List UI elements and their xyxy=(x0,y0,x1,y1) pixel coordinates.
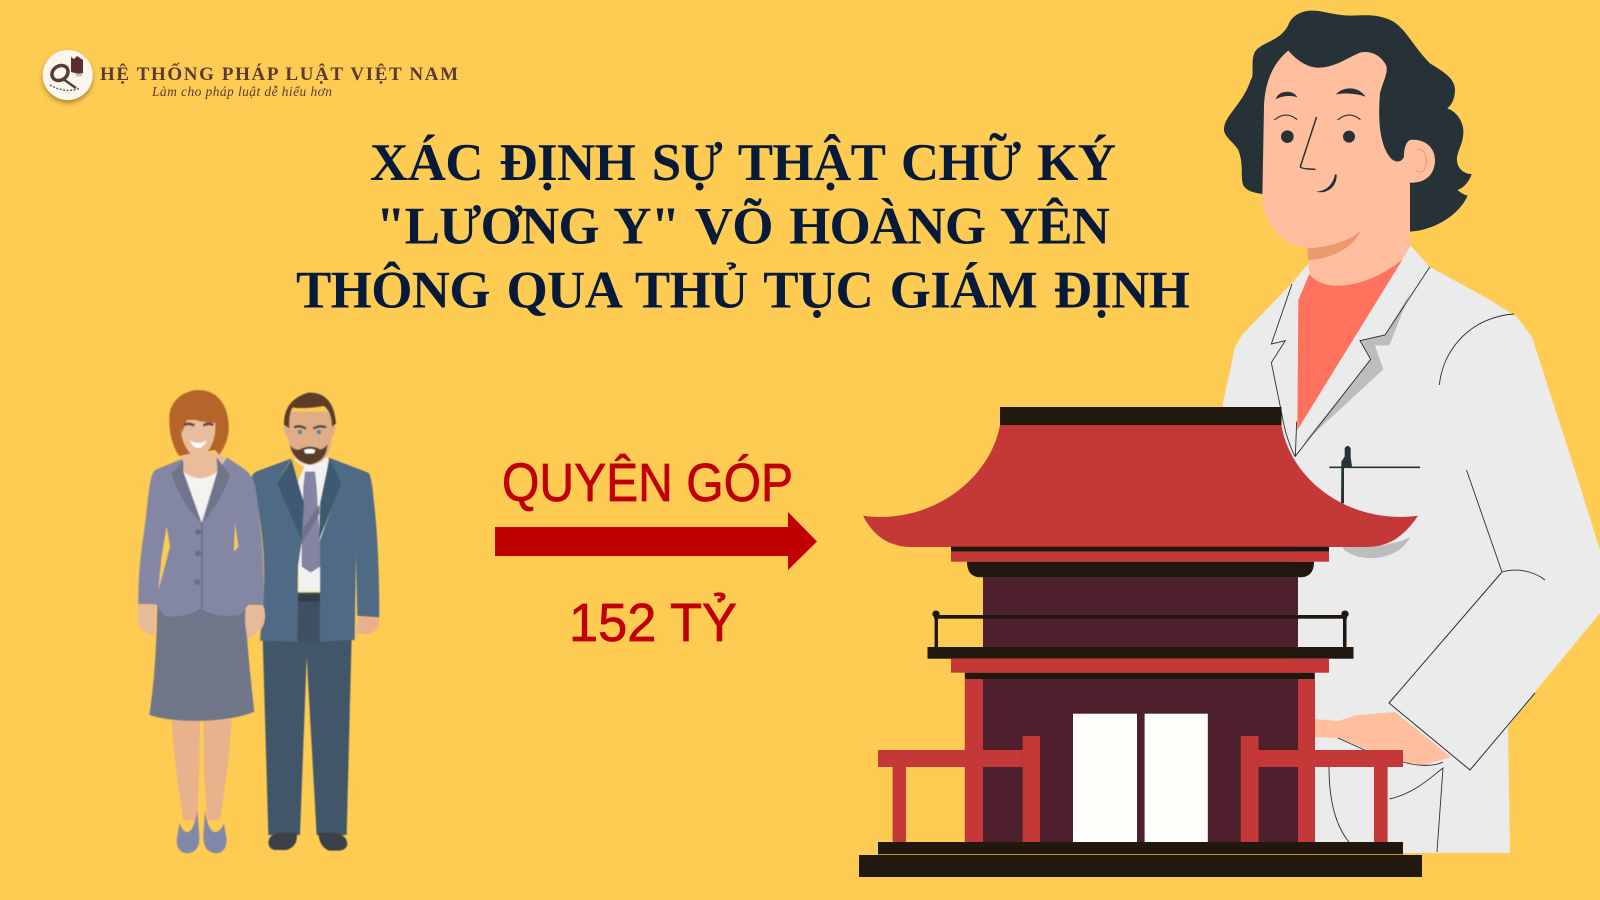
temple pillars xyxy=(878,679,1403,842)
doctor hand xyxy=(1315,712,1451,765)
logo tagline: Làm cho pháp luật dễ hiểu hơn xyxy=(151,84,332,99)
illustration: couple of donors xyxy=(137,390,379,853)
doctor head and upper body xyxy=(1224,11,1514,503)
face and neck xyxy=(1262,51,1435,286)
chin shadow xyxy=(1307,230,1361,260)
temple roof xyxy=(863,425,1418,547)
woman xyxy=(137,390,265,853)
title: "LƯƠNG Y" VÕ HOÀNG YÊN xyxy=(376,198,1110,256)
hair xyxy=(1224,11,1472,232)
temple roof cap xyxy=(1000,407,1282,425)
label: QUYÊN GÓP: QUYÊN GÓP xyxy=(502,453,793,513)
logo name: HỆ THỐNG PHÁP LUẬT VIỆT NAM xyxy=(100,63,458,85)
ear detail xyxy=(1416,149,1426,172)
title: XÁC ĐỊNH SỰ THẬT CHỮ KÝ xyxy=(370,133,1116,192)
amount: 152 TỶ: 152 TỶ xyxy=(569,593,737,653)
temple base xyxy=(878,842,1403,854)
upper eaves xyxy=(951,547,1329,552)
lower body xyxy=(983,679,1298,842)
arrow xyxy=(495,512,817,570)
title xyxy=(296,133,1190,320)
pocket and pen xyxy=(1329,465,1420,470)
temple doors xyxy=(1073,714,1137,842)
eyebrows, eyes, nose, smile xyxy=(1276,88,1366,192)
balcony floor xyxy=(928,647,1354,659)
logo: law system of Vietnam xyxy=(43,50,458,100)
illustration: doctor in white coat xyxy=(1222,11,1600,853)
shirt xyxy=(1297,259,1403,430)
title: THÔNG QUA THỦ TỤC GIÁM ĐỊNH xyxy=(296,262,1190,320)
man xyxy=(252,393,379,851)
illustration: red temple xyxy=(859,407,1422,877)
icon: round logo badge xyxy=(43,50,93,100)
sleeve outline xyxy=(1389,572,1535,770)
lapel shadow xyxy=(1303,293,1410,443)
shoulder seam xyxy=(1439,314,1514,385)
doctor coat xyxy=(1222,246,1600,853)
lapel lines xyxy=(1271,267,1430,457)
upper body xyxy=(983,577,1298,647)
balcony railing xyxy=(932,610,1349,647)
